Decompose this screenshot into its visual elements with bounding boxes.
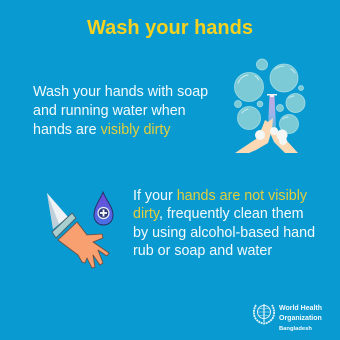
hands	[235, 118, 273, 153]
hand	[58, 222, 109, 268]
logo subtext: Bangladesh: Bangladesh	[279, 326, 312, 332]
bubble highlights	[238, 66, 295, 119]
plus badge	[98, 208, 109, 218]
text block: wash with soap	[33, 84, 208, 138]
logo emblem: WHO	[254, 304, 274, 324]
text block: alcohol-based rub: rub or soap and water	[133, 243, 272, 259]
text block: alcohol-based rub: If your hands are not visibly	[133, 188, 307, 204]
cuff	[52, 213, 76, 238]
text block: wash with soap: Wash your hands with soap	[33, 84, 208, 100]
logo text	[279, 304, 322, 322]
sanitizer drop	[94, 192, 113, 225]
logo text: Organization	[279, 315, 322, 322]
text block: alcohol-based rub: dirty, frequently clean them	[133, 206, 304, 222]
icon: gloved hand and sanitizer drop	[47, 192, 113, 268]
sleeve	[47, 193, 68, 229]
text block: alcohol-based rub	[133, 188, 315, 259]
icon: handwashing with bubbles	[234, 59, 305, 153]
tap	[267, 94, 277, 97]
title: Wash your hands	[87, 16, 253, 38]
text block: wash with soap: hands are visibly dirty	[33, 122, 170, 138]
bubbles	[234, 59, 305, 134]
text block: alcohol-based rub: by using alcohol-based hand	[133, 224, 315, 240]
water stream	[268, 96, 276, 127]
soap foam	[255, 127, 288, 145]
text block: wash with soap: and running water when	[33, 103, 186, 119]
logo text: World Health	[279, 305, 322, 312]
